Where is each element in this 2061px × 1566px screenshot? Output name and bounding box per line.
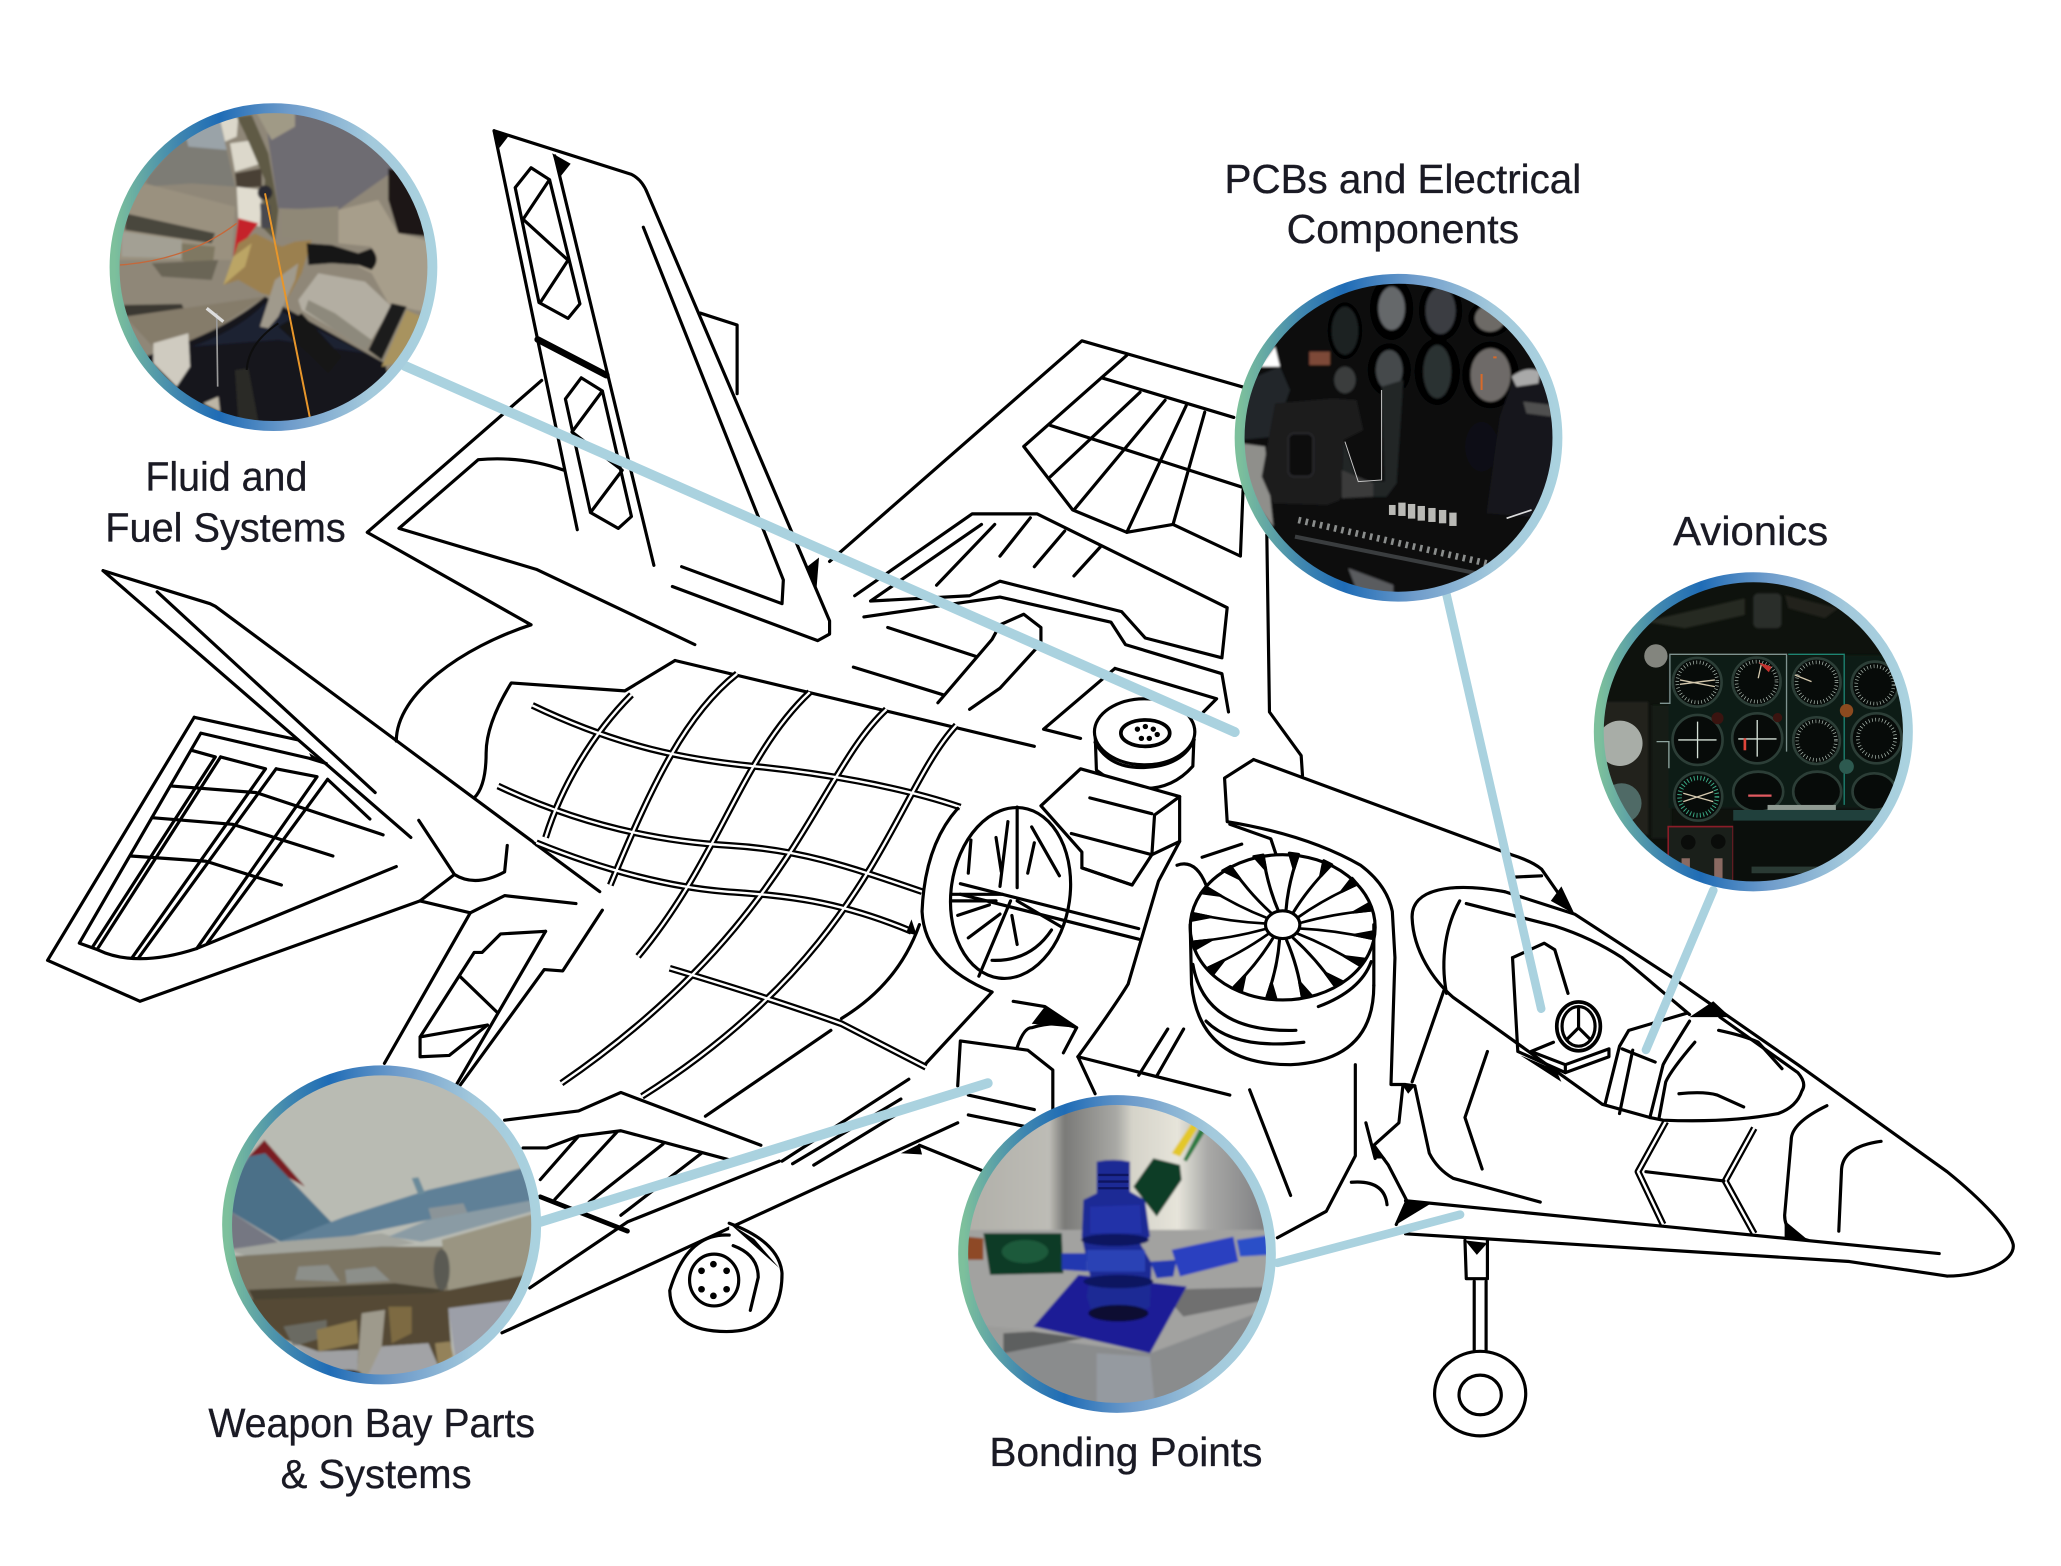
lower wing [502,1079,958,1333]
callout line: PCBs and electrical components [1446,594,1541,1009]
canopy frame [1412,876,2013,1276]
cockpit seat box [1605,1013,1687,1114]
exhaust ring [922,800,1139,992]
label: Weapon Bay Parts & Systems: Weapon Bay Parts [208,1400,535,1446]
photo circle: fluid and fuel systems [105,100,446,441]
fuselage upper outline [474,660,1034,892]
label: Fluid and Fuel Systems: Fluid and [145,454,307,500]
right wing [830,341,1243,738]
label: Bonding Points: Bonding Points [989,1429,1262,1475]
black wedge accents [309,129,1808,1268]
aircraft line drawing [48,129,2013,1436]
label: Weapon Bay Parts & Systems: & Systems [281,1451,472,1497]
equipment box [1041,769,1180,885]
ejection seat and roundel [1513,943,1609,1073]
callout line: bonding points [1277,1215,1460,1263]
callout line: weapon bay [540,1083,988,1222]
label: PCBs and Electrical Components: PCBs and Electrical [1225,156,1581,202]
callout line: fluid and fuel systems [405,366,1235,732]
body ribs [498,674,1754,1234]
fan mount [1078,535,1572,1095]
main landing gear [670,1223,782,1332]
nose structure [1406,1106,1947,1276]
photo circle: avionics [1594,572,1913,892]
left horizontal stabiliser [103,380,695,841]
round vent [1094,699,1195,789]
nose landing gear [1435,1240,1526,1436]
photo circle: bonding points [958,1095,1276,1413]
mid-fuselage lower lines [1250,991,1540,1238]
photo circle: PCBs and electrical components [1230,270,1571,611]
side bay [919,992,1077,1170]
photo circle: weapon bay parts and systems [222,1065,542,1384]
lift fan [1190,853,1375,1065]
lower tail panel [48,717,507,1001]
label: PCBs and Electrical Components: Components [1287,206,1519,252]
label: Fluid and Fuel Systems: Fuel Systems [105,505,346,551]
front canopy [1650,1017,1804,1121]
label: Avionics: Avionics [1673,508,1828,554]
weapon bay outline [384,896,602,1086]
callout line: avionics [1646,890,1713,1050]
tail fin [494,131,830,641]
